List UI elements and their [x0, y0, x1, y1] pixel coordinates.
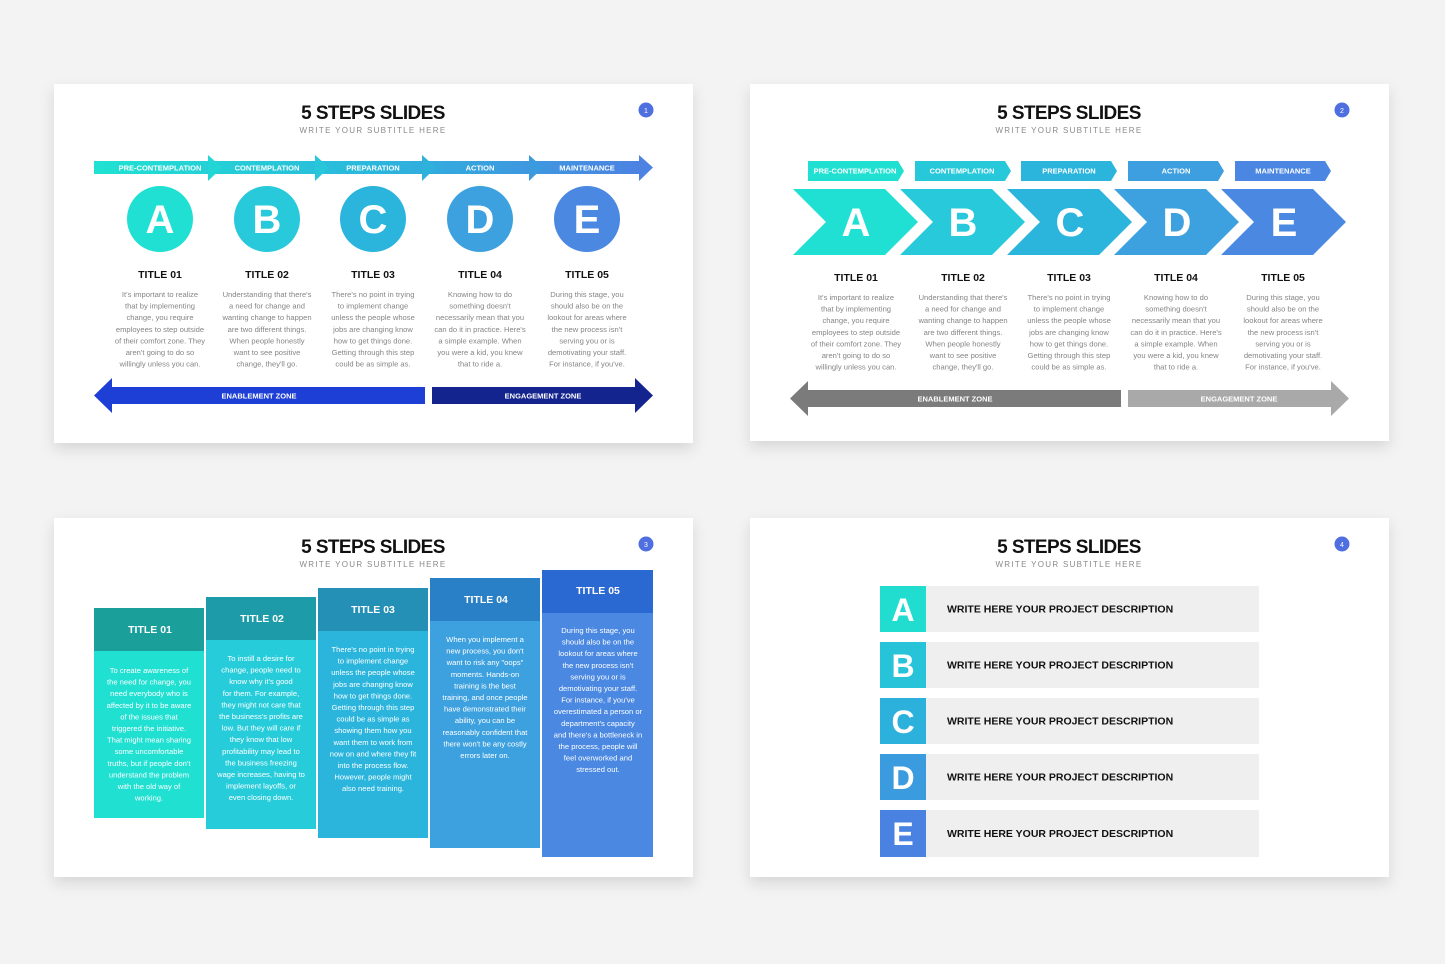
step titles and text: you were a kid, you knew — [1133, 351, 1219, 360]
badge: 4 — [1340, 542, 1344, 549]
step columns: how to get things done. — [334, 691, 412, 700]
step columns: jobs are changing know — [332, 680, 413, 689]
step columns: Getting through this step — [332, 703, 414, 712]
zone arrows: ENABLEMENT ZONE — [222, 392, 296, 400]
step titles and text: a simple example. When — [438, 336, 522, 345]
step columns: triggered the initiative. — [112, 724, 186, 733]
step titles and text: TITLE 02 — [941, 272, 985, 284]
description rows: A — [891, 592, 915, 628]
step titles and text: TITLE 03 — [1047, 272, 1091, 284]
step columns: TITLE 02 — [240, 613, 284, 625]
step titles and text: a need for change and — [229, 302, 305, 311]
step titles and text: There's no point in trying — [1028, 293, 1110, 302]
panel: slide 3 — [54, 518, 693, 877]
subtitle: WRITE YOUR SUBTITLE HERE — [995, 560, 1143, 569]
step titles and text: employees to step outside — [812, 328, 900, 337]
step columns: training, and once people — [442, 693, 528, 702]
step titles and text: the new process isn't — [552, 325, 623, 334]
circles A-E: B — [253, 198, 281, 242]
step titles and text: should also be on the — [1247, 305, 1319, 314]
badge — [638, 536, 654, 552]
title: 5 STEPS SLIDES — [301, 103, 445, 124]
stage arrow band: MAINTENANCE — [559, 164, 615, 172]
zone arrows gray — [790, 381, 1349, 416]
step titles and text: you were a kid, you knew — [437, 348, 523, 357]
step titles and text: Getting through this step — [332, 348, 414, 357]
step titles and text: employees to step outside — [116, 325, 204, 334]
step titles and text: willingly unless you can. — [814, 363, 897, 372]
step titles and text: are two different things. — [228, 325, 306, 334]
step columns: stressed out. — [576, 765, 620, 774]
step columns: have demonstrated their — [444, 705, 526, 714]
badge: 2 — [1340, 108, 1344, 115]
step titles and text — [811, 272, 1323, 372]
step columns: For instance, if you've — [561, 696, 635, 705]
subtitle: WRITE YOUR SUBTITLE HERE — [299, 560, 447, 569]
step titles and text: can do it in practice. Here's — [434, 325, 526, 334]
step columns: feel overworked and — [564, 754, 632, 763]
step titles and text: want to see positive — [233, 348, 300, 357]
step titles and text: TITLE 03 — [351, 269, 395, 281]
step columns: truths, but if people don't — [108, 759, 191, 768]
step titles and text: of their comfort zone. They — [115, 336, 205, 345]
step titles and text: Getting through this step — [1028, 351, 1110, 360]
description rows: WRITE HERE YOUR PROJECT DESCRIPTION — [947, 772, 1173, 784]
step columns: training is the best — [454, 681, 517, 690]
step titles and text: When people honestly — [229, 336, 305, 345]
step titles and text: want to see positive — [929, 351, 996, 360]
step columns: reasonably confident that — [443, 728, 528, 737]
step columns: need everybody who is — [110, 689, 188, 698]
badge: 1 — [644, 108, 648, 115]
step columns: the need for change, you — [107, 678, 191, 687]
step columns: of the issues that — [120, 712, 179, 721]
description rows: WRITE HERE YOUR PROJECT DESCRIPTION — [947, 604, 1173, 616]
step columns: understand the problem — [109, 770, 189, 779]
step columns: they might not care that — [221, 700, 302, 709]
step titles and text: could be as simple as. — [1031, 363, 1107, 372]
step columns: implement layoffs, or — [226, 782, 296, 791]
step titles and text: aren't going to do so — [822, 351, 890, 360]
step titles and text: to implement change — [1034, 305, 1104, 314]
step columns: they know that low — [230, 735, 293, 744]
stage labels: MAINTENANCE — [1255, 166, 1311, 176]
step columns: for them. For example, — [223, 689, 299, 698]
step columns: the business's profits are — [219, 712, 303, 721]
step columns: there won't be any costly — [443, 739, 527, 748]
step columns: During this stage, you — [561, 626, 635, 635]
step titles and text: willingly unless you can. — [118, 360, 201, 369]
step titles and text: Knowing how to do — [448, 290, 512, 299]
step titles and text: something doesn't — [449, 302, 512, 311]
step columns: the process, people will — [559, 742, 638, 751]
step columns: could be as simple as — [336, 715, 410, 724]
step columns: department's capacity — [561, 719, 635, 728]
step titles and text: demotivating your staff. — [1244, 351, 1322, 360]
step columns: some uncomfortable — [115, 747, 183, 756]
step titles and text: It's important to realize — [818, 293, 894, 302]
description rows: D — [891, 760, 915, 796]
circles A-E — [127, 186, 620, 252]
chevrons A-E: D — [1163, 201, 1191, 245]
stage arrow band: PREPARATION — [346, 164, 400, 172]
step columns: TITLE 01 — [128, 624, 172, 636]
step titles and text — [115, 269, 627, 369]
step titles and text: the new process isn't — [1248, 328, 1319, 337]
zone arrows gray: ENGAGEMENT ZONE — [1201, 394, 1277, 404]
step columns: showing them how you — [334, 726, 412, 735]
step titles and text: are two different things. — [924, 328, 1002, 337]
circles A-E: C — [359, 198, 387, 242]
step titles and text: unless the people whose — [331, 313, 415, 322]
circles A-E: A — [146, 198, 174, 242]
description rows: WRITE HERE YOUR PROJECT DESCRIPTION — [947, 828, 1173, 840]
step titles and text: serving you or is — [1255, 339, 1311, 348]
title: 5 STEPS SLIDES — [997, 537, 1141, 558]
subtitle: WRITE YOUR SUBTITLE HERE — [299, 126, 447, 135]
badge — [638, 102, 654, 118]
step columns: affected by it to be aware — [107, 701, 191, 710]
step columns: now on and where they fit — [330, 749, 417, 758]
badge — [1334, 536, 1350, 552]
description rows: B — [891, 648, 915, 684]
stage arrow band: ACTION — [466, 164, 494, 172]
step columns: TITLE 05 — [576, 585, 620, 597]
step columns: moments. Hands-on — [451, 670, 519, 679]
step titles and text: should also be on the — [551, 302, 623, 311]
description rows: WRITE HERE YOUR PROJECT DESCRIPTION — [947, 660, 1173, 672]
step titles and text: that by implementing — [125, 302, 195, 311]
step columns: and there's a bottleneck in — [554, 730, 642, 739]
step titles and text: a need for change and — [925, 305, 1001, 314]
step titles and text: a simple example. When — [1134, 339, 1218, 348]
panel: slide 1 — [54, 84, 693, 443]
step columns: demotivating your staff. — [559, 684, 637, 693]
description rows: E — [892, 816, 914, 852]
step columns: know why it's good — [229, 677, 293, 686]
step titles and text: serving you or is — [559, 336, 615, 345]
step columns: lookout for areas where — [558, 649, 638, 658]
step titles and text: could be as simple as. — [335, 360, 411, 369]
step columns: the new process isn't — [563, 661, 634, 670]
step columns: unless the people whose — [331, 668, 415, 677]
step columns: profitability may lead to — [222, 747, 300, 756]
stage labels: PRE-CONTEMPLATION — [814, 166, 896, 176]
subtitle: WRITE YOUR SUBTITLE HERE — [995, 126, 1143, 135]
step columns: TITLE 03 — [351, 604, 395, 616]
step titles and text: lookout for areas where — [547, 313, 627, 322]
step columns: new process, you don't — [446, 647, 525, 656]
step titles and text: It's important to realize — [122, 290, 198, 299]
panel: slide 2 — [750, 84, 1389, 441]
step columns: However, people might — [334, 773, 413, 782]
step titles and text: how to get things done. — [334, 336, 412, 345]
step titles and text: During this stage, you — [550, 290, 624, 299]
step columns: into the process flow. — [338, 761, 408, 770]
step columns: low. But they will care if — [222, 724, 301, 733]
step titles and text: aren't going to do so — [126, 348, 194, 357]
step columns: That might mean sharing — [107, 736, 191, 745]
step columns: want to risk any "oops" — [446, 658, 524, 667]
step titles and text: For instance, if you've. — [1245, 363, 1321, 372]
step columns: change, people need to — [221, 666, 301, 675]
zone arrows — [94, 378, 653, 413]
step columns: ability, you can be — [455, 716, 515, 725]
description rows — [880, 586, 1259, 857]
step columns: even closing down. — [229, 793, 293, 802]
stage labels: ACTION — [1162, 166, 1190, 176]
badge — [1334, 102, 1350, 118]
step columns: When you implement a — [446, 635, 525, 644]
step titles and text: During this stage, you — [1246, 293, 1320, 302]
step titles and text: change, you require — [822, 316, 890, 325]
zone arrows gray: ENABLEMENT ZONE — [918, 394, 992, 404]
zone arrows: ENGAGEMENT ZONE — [505, 392, 581, 400]
chevrons A-E: A — [842, 201, 870, 245]
step titles and text: to implement change — [338, 302, 408, 311]
step titles and text: unless the people whose — [1027, 316, 1111, 325]
title: 5 STEPS SLIDES — [301, 537, 445, 558]
step columns: should also be on the — [562, 638, 634, 647]
step columns: There's no point in trying — [332, 645, 414, 654]
step titles and text: change, they'll go. — [237, 360, 297, 369]
step titles and text: how to get things done. — [1030, 339, 1108, 348]
step titles and text: change, you require — [126, 313, 194, 322]
step columns: to implement change — [338, 657, 408, 666]
step titles and text: Understanding that there's — [223, 290, 312, 299]
step titles and text: something doesn't — [1145, 305, 1208, 314]
stage arrow band: CONTEMPLATION — [235, 164, 299, 172]
step titles and text: TITLE 04 — [458, 269, 502, 281]
step titles and text: can do it in practice. Here's — [1130, 328, 1222, 337]
title: 5 STEPS SLIDES — [997, 103, 1141, 124]
circles A-E: E — [574, 198, 600, 242]
step titles and text: Understanding that there's — [919, 293, 1008, 302]
description rows: C — [891, 704, 915, 740]
step titles and text: of their comfort zone. They — [811, 339, 901, 348]
step titles and text: wanting change to happen — [221, 313, 312, 322]
step titles and text: necessarily mean that you — [436, 313, 524, 322]
stage arrow band — [94, 155, 653, 181]
chevrons A-E: C — [1056, 201, 1084, 245]
panel: slide 4 — [750, 518, 1389, 877]
step titles and text: Knowing how to do — [1144, 293, 1208, 302]
step titles and text: TITLE 01 — [138, 269, 182, 281]
step titles and text: TITLE 05 — [1261, 272, 1305, 284]
badge: 3 — [644, 542, 648, 549]
step titles and text: TITLE 04 — [1154, 272, 1198, 284]
step titles and text: that by implementing — [821, 305, 891, 314]
step titles and text: TITLE 02 — [245, 269, 289, 281]
step columns: working. — [134, 794, 163, 803]
stage labels: CONTEMPLATION — [930, 166, 994, 176]
step columns: the business freezing — [225, 758, 297, 767]
chevrons A-E — [793, 189, 1346, 255]
step titles and text: necessarily mean that you — [1132, 316, 1220, 325]
step columns: serving you or is — [570, 672, 626, 681]
chevrons A-E: B — [949, 201, 977, 245]
stage labels — [808, 161, 1331, 181]
step titles and text: lookout for areas where — [1243, 316, 1323, 325]
stage arrow band: PRE-CONTEMPLATION — [119, 164, 201, 172]
step titles and text: TITLE 01 — [834, 272, 878, 284]
step titles and text: that to ride a. — [458, 360, 502, 369]
chevrons A-E: E — [1271, 201, 1297, 245]
step columns: To create awareness of — [110, 666, 189, 675]
step columns — [94, 570, 653, 857]
step titles and text: For instance, if you've. — [549, 360, 625, 369]
step titles and text: When people honestly — [925, 339, 1001, 348]
step columns: also need training. — [342, 784, 404, 793]
step columns: wage increases, having to — [216, 770, 305, 779]
step titles and text: that to ride a. — [1154, 363, 1198, 372]
step titles and text: wanting change to happen — [917, 316, 1008, 325]
step titles and text: TITLE 05 — [565, 269, 609, 281]
description rows: WRITE HERE YOUR PROJECT DESCRIPTION — [947, 716, 1173, 728]
step titles and text: jobs are changing know — [1028, 328, 1109, 337]
step titles and text: There's no point in trying — [332, 290, 414, 299]
step columns: TITLE 04 — [464, 594, 508, 606]
step columns: with the old way of — [117, 782, 181, 791]
step titles and text: demotivating your staff. — [548, 348, 626, 357]
step columns: To instill a desire for — [227, 654, 295, 663]
step columns: want them to work from — [333, 738, 412, 747]
stage labels: PREPARATION — [1042, 166, 1096, 176]
step columns: overestimated a person or — [554, 707, 643, 716]
step columns: errors later on. — [460, 751, 510, 760]
circles A-E: D — [466, 198, 494, 242]
step titles and text: change, they'll go. — [933, 363, 993, 372]
step titles and text: jobs are changing know — [332, 325, 413, 334]
